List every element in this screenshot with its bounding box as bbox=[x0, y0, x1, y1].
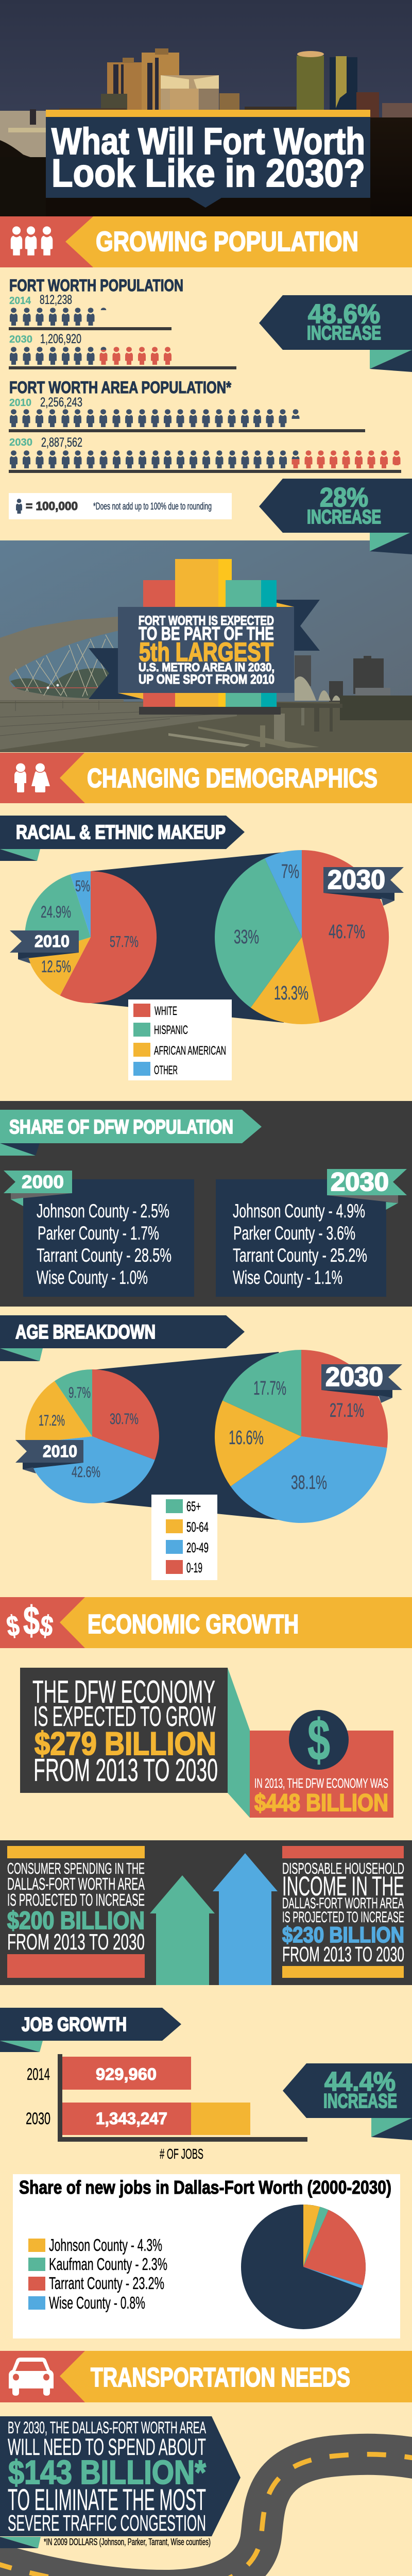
box: 2000 shares bbox=[23, 1179, 194, 1297]
bar values: 929,960 bbox=[96, 2065, 157, 2083]
pie labels bbox=[39, 1378, 364, 1494]
callout text bbox=[139, 614, 274, 687]
callout: 48.6% increase: INCREASE bbox=[307, 323, 381, 344]
legend: racial groups bbox=[128, 999, 232, 1080]
hero photo: Fort Worth skyline at dusk bbox=[0, 0, 412, 216]
chart: job growth bars bbox=[26, 2054, 307, 2162]
tag: 2030 bbox=[327, 1167, 407, 1210]
pie labels: 57.7% bbox=[110, 933, 139, 951]
axis label: # OF JOBS bbox=[160, 2146, 203, 2162]
tag: 2000: 2000 bbox=[22, 1172, 64, 1192]
legend: racial groups: AFRICAN AMERICAN bbox=[154, 1044, 226, 1058]
pie chart bbox=[241, 2205, 366, 2329]
box: 2030 shares: Wise County - 1.1% bbox=[233, 1267, 342, 1288]
callout: 28% increase: 28% bbox=[320, 483, 368, 513]
tag: 2010 bbox=[15, 1440, 83, 1473]
icon: man and woman bbox=[14, 764, 50, 792]
panel: consumer spending and household income bbox=[0, 1840, 412, 1985]
bar values: 1,343,247 bbox=[96, 2109, 167, 2128]
consumer spending block: DALLAS-FORT WORTH AREA bbox=[7, 1874, 145, 1893]
callout: 143 billion: TO ELIMINATE THE MOST bbox=[8, 2483, 206, 2517]
legend: Kaufman County - 2.3% bbox=[49, 2255, 167, 2274]
callout text: FORT WORTH IS EXPECTED bbox=[139, 614, 274, 628]
icon: dollar signs: $ bbox=[23, 1598, 40, 1643]
legend: age groups: 20-49 bbox=[186, 1540, 209, 1555]
box: 2000 shares: Wise County - 1.0% bbox=[37, 1267, 148, 1288]
legend: age groups bbox=[151, 1495, 217, 1580]
callout: DFW economy growth: FROM 2013 TO 2030 bbox=[33, 1753, 218, 1788]
2010 label: 2010 bbox=[9, 397, 31, 409]
2030 people row bbox=[10, 347, 171, 365]
footnote: *Does not add up to 100% due to rounding bbox=[93, 501, 212, 512]
year labels: 2030 bbox=[26, 2109, 50, 2128]
legend: Johnson County - 4.3% bbox=[49, 2235, 162, 2255]
ribbon tails bbox=[89, 600, 320, 699]
2030 value: 1,206,920 bbox=[40, 332, 81, 346]
box: 2000 shares: Parker County - 1.7% bbox=[38, 1223, 159, 1244]
title banner bbox=[46, 110, 370, 208]
heading text: ECONOMIC GROWTH bbox=[88, 1609, 299, 1639]
pie: 2010 bbox=[25, 1369, 159, 1503]
icon: car bbox=[9, 2358, 54, 2396]
legend: Tarrant County - 23.2% bbox=[49, 2274, 164, 2293]
2030 label: 2030 bbox=[9, 437, 32, 448]
heading: FORT WORTH POPULATION bbox=[9, 276, 183, 295]
pie labels: 9.7% bbox=[68, 1384, 91, 1401]
callout: 48.6% increase bbox=[259, 295, 412, 372]
section header: transportation needs bbox=[0, 2351, 412, 2402]
icon: dollar signs: $ bbox=[5, 1609, 21, 1642]
consumer spending block: CONSUMER SPENDING IN THE bbox=[7, 1859, 145, 1877]
callout: DFW economy growth bbox=[20, 1668, 250, 1818]
section header: changing demographics bbox=[0, 753, 412, 803]
ribbon heading: racial and ethnic makeup: RACIAL & ETHNIC MAKEUP bbox=[16, 822, 226, 843]
pie labels: 17.7% bbox=[253, 1378, 286, 1399]
pie labels: 30.7% bbox=[110, 1411, 139, 1428]
ribbon heading: SHARE OF DFW POPULATION bbox=[9, 1116, 233, 1138]
consumer spending block: $200 BILLION bbox=[7, 1907, 145, 1935]
panel: Fort Worth population bbox=[9, 276, 236, 369]
legend: racial groups: WHITE bbox=[154, 1004, 177, 1018]
icon: dollar coin bbox=[289, 1707, 349, 1772]
title text bbox=[52, 121, 365, 195]
callout text: UP ONE SPOT FROM 2010 bbox=[139, 672, 274, 687]
callout: 2013 economy: $448 BILLION bbox=[254, 1789, 388, 1816]
consumer spending block: IS PROJECTED TO INCREASE bbox=[7, 1890, 145, 1909]
callout: 44.4% increase: 44.4% bbox=[324, 2067, 396, 2097]
arrow: blue up bbox=[213, 1853, 278, 1985]
callout text: 5th LARGEST bbox=[139, 637, 273, 667]
pie labels: 27.1% bbox=[330, 1400, 364, 1421]
icon: three people bbox=[11, 226, 53, 256]
legend: Wise County - 0.8% bbox=[49, 2293, 145, 2312]
callout: 44.4% increase bbox=[283, 2063, 412, 2140]
household income block bbox=[282, 1846, 404, 1978]
2030 value: 2,887,562 bbox=[41, 435, 82, 450]
legend: racial groups: HISPANIC bbox=[154, 1023, 188, 1037]
callout: DFW economy growth: THE DFW ECONOMY bbox=[32, 1674, 215, 1710]
callout: 48.6% increase: 48.6% bbox=[308, 299, 380, 329]
panel: share of new jobs bbox=[13, 2174, 400, 2338]
icon: dollar signs: $ bbox=[38, 1609, 55, 1642]
bar values bbox=[96, 2065, 167, 2128]
ribbon heading: age breakdown bbox=[0, 1315, 245, 1361]
title text: What Will Fort Worth bbox=[52, 121, 365, 162]
2030 label: 2030 bbox=[9, 334, 32, 345]
pie: 2030 bbox=[215, 850, 389, 1024]
chart: age pies 2010 to 2030 bbox=[15, 1350, 402, 1523]
pie labels: 33% bbox=[234, 926, 259, 948]
callout: 28% increase: INCREASE bbox=[307, 506, 381, 528]
legend: racial groups: OTHER bbox=[154, 1063, 178, 1077]
ribbon heading bbox=[0, 1110, 262, 1156]
pie labels: 38.1% bbox=[291, 1472, 327, 1494]
tag: 2030 bbox=[321, 1362, 402, 1403]
bridge arch bbox=[0, 616, 124, 702]
pie labels: 13.3% bbox=[274, 982, 308, 1004]
callout: 143 billion: BY 2030, THE DALLAS-FORT WORTH AREA bbox=[8, 2418, 206, 2437]
pie labels: 7% bbox=[281, 861, 299, 883]
callout text: TO BE PART OF THE bbox=[139, 623, 274, 644]
title text: Look Like in 2030? bbox=[52, 151, 365, 195]
legend: person equals 100,000 bbox=[9, 493, 232, 519]
box: 2000 shares: Tarrant County - 28.5% bbox=[37, 1245, 171, 1266]
pie labels: 5% bbox=[75, 877, 90, 895]
box: 2030 shares bbox=[216, 1179, 386, 1297]
consumer spending block: FROM 2013 TO 2030 bbox=[7, 1929, 145, 1955]
illustration: winding road bbox=[0, 2454, 412, 2576]
icon: person bbox=[16, 499, 22, 514]
pie labels: 17.2% bbox=[39, 1412, 65, 1429]
callout: 143 billion: $143 BILLION* bbox=[8, 2453, 207, 2491]
arrow: green up bbox=[150, 1875, 215, 1985]
2014 value: 812,238 bbox=[40, 293, 72, 307]
callout: 5th largest metro area bbox=[89, 559, 320, 715]
ribbon heading: job growth bbox=[0, 2008, 181, 2052]
year labels: 2014 bbox=[27, 2065, 50, 2083]
panel: Fort Worth area population bbox=[9, 378, 401, 473]
tag: 2030: 2030 bbox=[328, 865, 385, 895]
chart: racial makeup pies 2010 to 2030 bbox=[10, 850, 404, 1024]
2014 people row bbox=[10, 308, 107, 326]
bridge wall bbox=[0, 702, 237, 750]
pie labels: 16.6% bbox=[229, 1427, 264, 1449]
tag: 2010 bbox=[10, 930, 79, 963]
pie labels: 12.5% bbox=[41, 957, 71, 976]
year labels bbox=[26, 2065, 50, 2128]
legend value: = 100,000 bbox=[26, 499, 78, 513]
callout: 28% increase bbox=[259, 479, 412, 554]
ribbon heading: job growth: JOB GROWTH bbox=[22, 2014, 127, 2036]
consumer spending block bbox=[7, 1846, 145, 1978]
pie labels: 46.7% bbox=[329, 921, 365, 943]
panel: share of DFW population bbox=[0, 1101, 412, 1307]
heading: FORT WORTH AREA POPULATION* bbox=[9, 378, 231, 397]
footnote: 2009 dollars: *IN 2009 DOLLARS (Johnson, Parker, Tarrant, Wise counties) bbox=[44, 2537, 211, 2547]
icon: dollar signs bbox=[5, 1598, 55, 1643]
callout text: U.S. METRO AREA IN 2030, bbox=[139, 660, 274, 674]
section header: economic growth bbox=[0, 1597, 412, 1648]
legend: age groups: 0-19 bbox=[186, 1560, 202, 1575]
tag: 2030: 2030 bbox=[331, 1167, 389, 1196]
tag: 2000 bbox=[4, 1171, 72, 1206]
callout: 143 billion: SEVERE TRAFFIC CONGESTION bbox=[8, 2511, 206, 2536]
box: 2000 shares: Johnson County - 2.5% bbox=[37, 1200, 169, 1222]
legend: age groups: 50-64 bbox=[186, 1519, 209, 1535]
2010 people row bbox=[10, 409, 300, 427]
pie labels bbox=[41, 861, 365, 1004]
ribbon heading: racial and ethnic makeup bbox=[0, 816, 245, 861]
callout: 143 billion: WILL NEED TO SPEND ABOUT bbox=[8, 2434, 206, 2460]
panel bbox=[118, 607, 294, 693]
tag: 2010: 2010 bbox=[35, 932, 70, 951]
pie labels: 42.6% bbox=[72, 1464, 100, 1481]
pie: 2030 bbox=[215, 1350, 388, 1523]
tag: 2030 bbox=[323, 865, 404, 906]
2030 people row bbox=[10, 450, 401, 468]
pie: 2010 bbox=[25, 871, 157, 1003]
box: 2030 shares: Parker County - 3.6% bbox=[233, 1223, 355, 1244]
section header: growing population bbox=[0, 216, 412, 267]
legend: age groups: 65+ bbox=[186, 1499, 201, 1514]
tag: 2010: 2010 bbox=[43, 1442, 77, 1461]
legend bbox=[28, 2235, 167, 2312]
callout: 2013 economy bbox=[250, 1707, 393, 1818]
2010 value: 2,256,243 bbox=[40, 395, 82, 410]
colored skyline bars bbox=[139, 559, 281, 715]
tag: 2030: 2030 bbox=[325, 1362, 383, 1392]
callout: DFW economy growth: $279 BILLION bbox=[35, 1726, 216, 1762]
2014 label: 2014 bbox=[9, 295, 31, 307]
photo: Seventh Street bridge at dusk bbox=[0, 540, 412, 752]
callout: DFW economy growth: IS EXPECTED TO GROW bbox=[33, 1700, 216, 1732]
pie labels: 24.9% bbox=[41, 903, 71, 921]
icon: dollar coin: $ bbox=[307, 1707, 330, 1772]
ribbon heading: age breakdown: AGE BREAKDOWN bbox=[15, 1321, 156, 1343]
callout: 143 billion bbox=[0, 2416, 241, 2548]
